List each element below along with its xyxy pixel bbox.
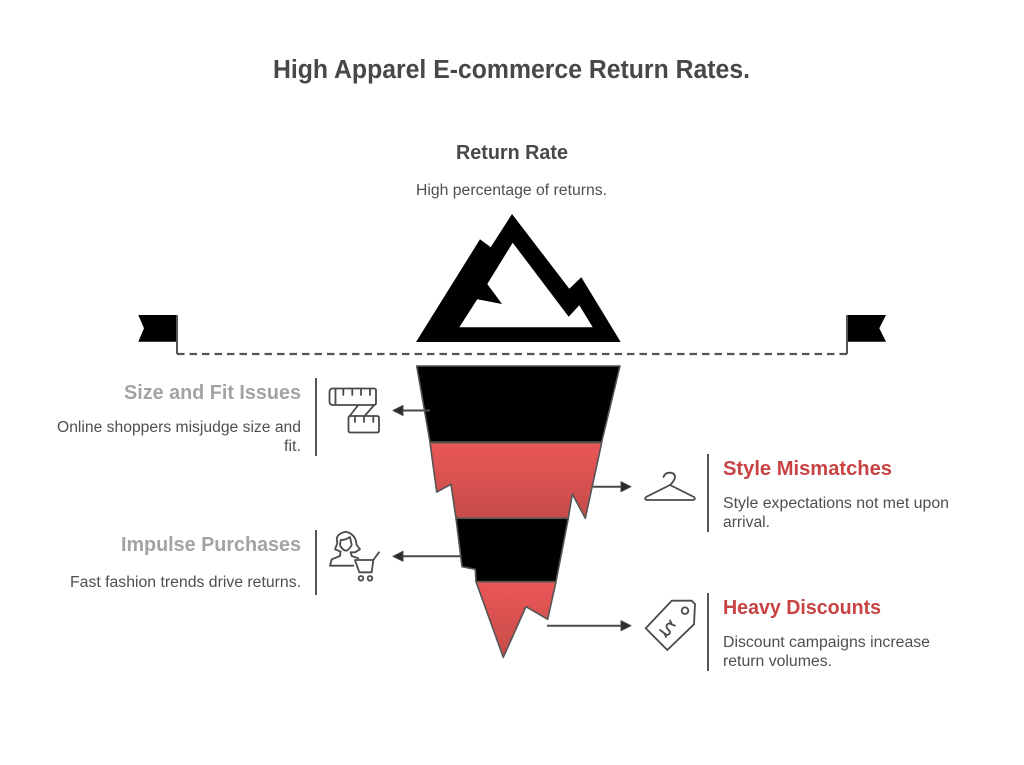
icon: measuring tape bbox=[330, 388, 379, 432]
iceberg underwater segments bbox=[417, 366, 620, 657]
icon: shopper with cart bbox=[330, 532, 379, 581]
waterline with flags bbox=[138, 315, 886, 354]
icon: hanger bbox=[645, 473, 695, 500]
segment: heavy discounts bbox=[476, 582, 556, 657]
left flag bbox=[138, 315, 177, 342]
segment: impulse purchases bbox=[456, 518, 568, 582]
panel: size and fit issues: Online shoppers misjudge size and bbox=[57, 419, 301, 436]
panel: style mismatches bbox=[708, 454, 949, 532]
text block: return rate bbox=[416, 142, 607, 199]
arrow: impulse purchases bbox=[393, 551, 460, 561]
panel: size and fit issues: Size and Fit Issues bbox=[124, 382, 301, 404]
segment: style mismatches bbox=[430, 443, 602, 518]
panel: heavy discounts: Discount campaigns increase bbox=[723, 634, 930, 651]
panel: impulse purchases bbox=[70, 530, 316, 595]
segment: size and fit bbox=[417, 366, 620, 442]
right flag bbox=[847, 315, 886, 342]
panel: impulse purchases: Impulse Purchases bbox=[121, 534, 301, 556]
panel: heavy discounts bbox=[708, 593, 930, 671]
panel: heavy discounts: return volumes. bbox=[723, 653, 832, 670]
arrow: heavy discounts bbox=[547, 621, 631, 631]
panel: size and fit issues: fit. bbox=[284, 438, 301, 455]
text block: return rate: Return Rate bbox=[456, 142, 568, 164]
panel: size and fit issues bbox=[57, 378, 316, 456]
title: High Apparel E-commerce Return Rates. bbox=[273, 56, 750, 84]
text block: return rate: High percentage of returns. bbox=[416, 182, 607, 199]
panel: style mismatches: arrival. bbox=[723, 514, 770, 531]
arrow: style mismatches bbox=[593, 482, 631, 492]
icon: price tag bbox=[646, 601, 695, 650]
arrow: size and fit bbox=[393, 406, 430, 416]
panel: style mismatches: Style expectations not met upon bbox=[723, 495, 949, 512]
panel: impulse purchases: Fast fashion trends drive returns. bbox=[70, 574, 301, 591]
panel: heavy discounts: Heavy Discounts bbox=[723, 597, 881, 619]
iceberg tip bbox=[416, 214, 621, 342]
panel: style mismatches: Style Mismatches bbox=[723, 458, 892, 480]
